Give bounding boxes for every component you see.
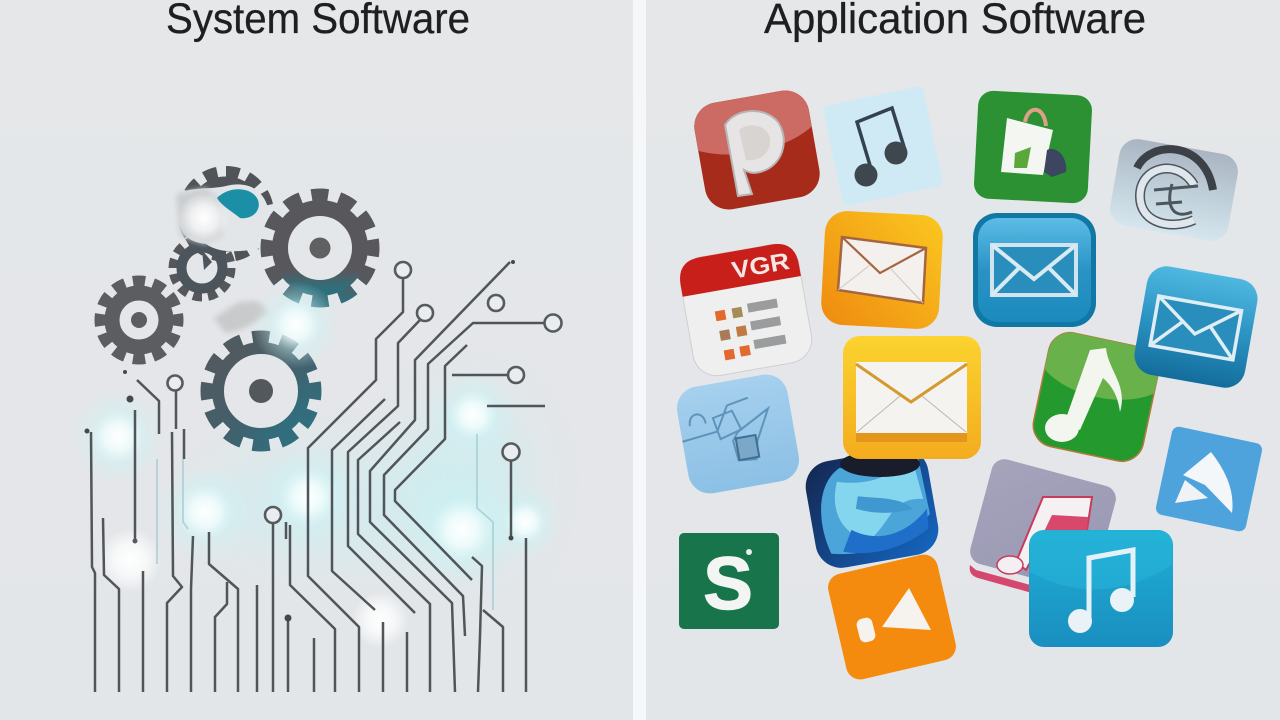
icon: grey at-sign (1107, 136, 1241, 244)
circuit node rings (168, 262, 562, 523)
gear: left (100, 281, 178, 359)
icon: green S (679, 533, 779, 629)
icon: light blue sketch (673, 371, 803, 497)
icon: green shopping bag (973, 90, 1093, 204)
icon: blue arrow shape (1155, 425, 1263, 533)
icon: blue music note (1029, 530, 1173, 647)
gear: teal lower (207, 337, 315, 445)
icon: calendar: VGR (730, 248, 792, 285)
icon: green S: S (703, 542, 753, 625)
panel: system software (0, 0, 633, 720)
icon: red P (694, 90, 820, 210)
gear: small middle (173, 239, 231, 297)
icon: green music note (1032, 332, 1158, 462)
icon: calendar (676, 240, 816, 380)
panel: application software (646, 0, 1280, 720)
gear: large top right (267, 195, 373, 301)
globe blob (176, 184, 274, 251)
gear: small top with globe (184, 172, 268, 256)
circuit traces (84, 260, 545, 692)
icon: blue envelope square (973, 213, 1096, 327)
icon: orange video (825, 552, 959, 682)
grey fragment (213, 301, 268, 333)
icon: light blue music note (823, 86, 943, 206)
glow lights (72, 373, 561, 648)
glow over gears (252, 281, 340, 369)
icon: tilted blue envelope (1131, 263, 1261, 391)
icon: orange envelope (820, 210, 944, 330)
icon: grey pink music note (967, 456, 1119, 594)
icon: yellow envelope (843, 336, 981, 459)
icon: dark blue water (802, 444, 942, 572)
